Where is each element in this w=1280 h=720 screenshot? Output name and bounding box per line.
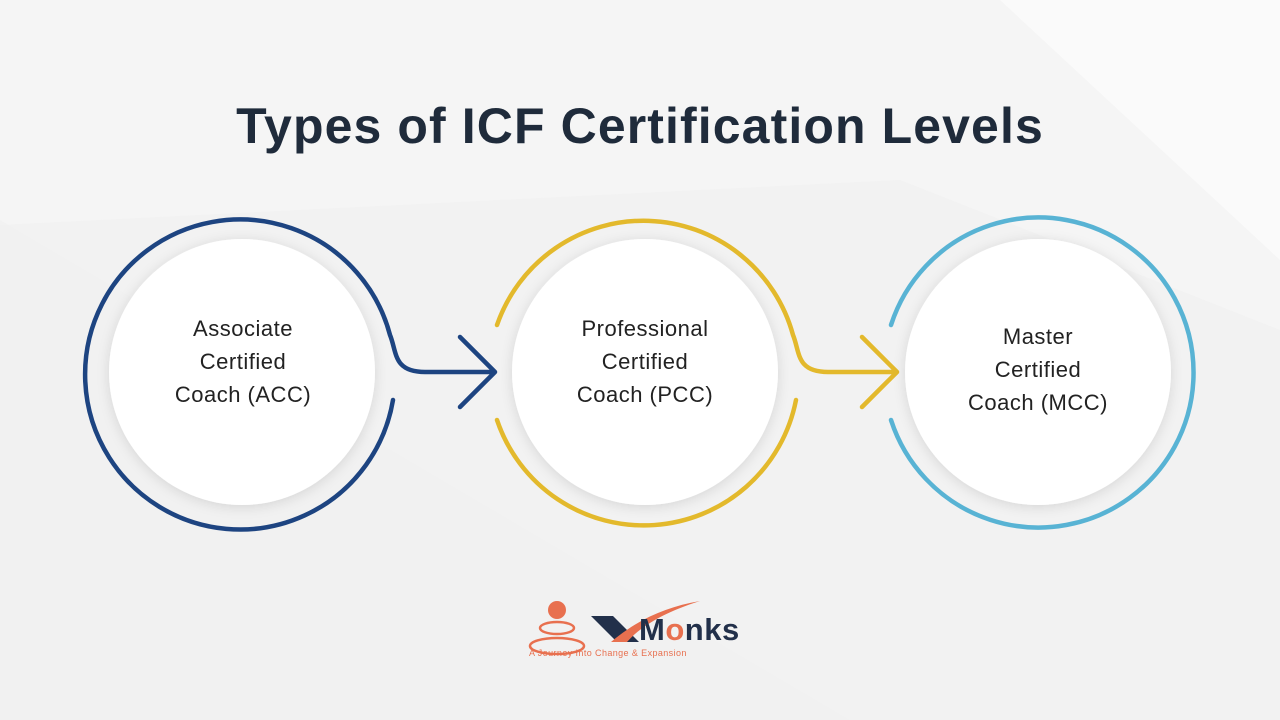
label: MCC: Master [1003,324,1073,349]
label: PCC: Professional [581,316,709,341]
label: MCC: Certified [995,357,1081,382]
label: ACC: Associate [193,316,293,341]
level 3: MCC [891,218,1194,528]
title: Types of ICF Certification Levels [236,98,1044,154]
level 1: ACC [85,219,495,529]
label: PCC [577,316,713,407]
level 2: PCC [497,221,897,525]
logo: A Journey Into Change & Expansion [529,648,687,658]
label: ACC [175,316,311,407]
logo [528,601,740,658]
label: MCC [968,324,1108,415]
label: ACC: Certified [200,349,286,374]
label: PCC: Coach (PCC) [577,382,713,407]
label: MCC: Coach (MCC) [968,390,1108,415]
label: ACC: Coach (ACC) [175,382,311,407]
label: PCC: Certified [602,349,688,374]
logo: Monks [639,612,740,647]
